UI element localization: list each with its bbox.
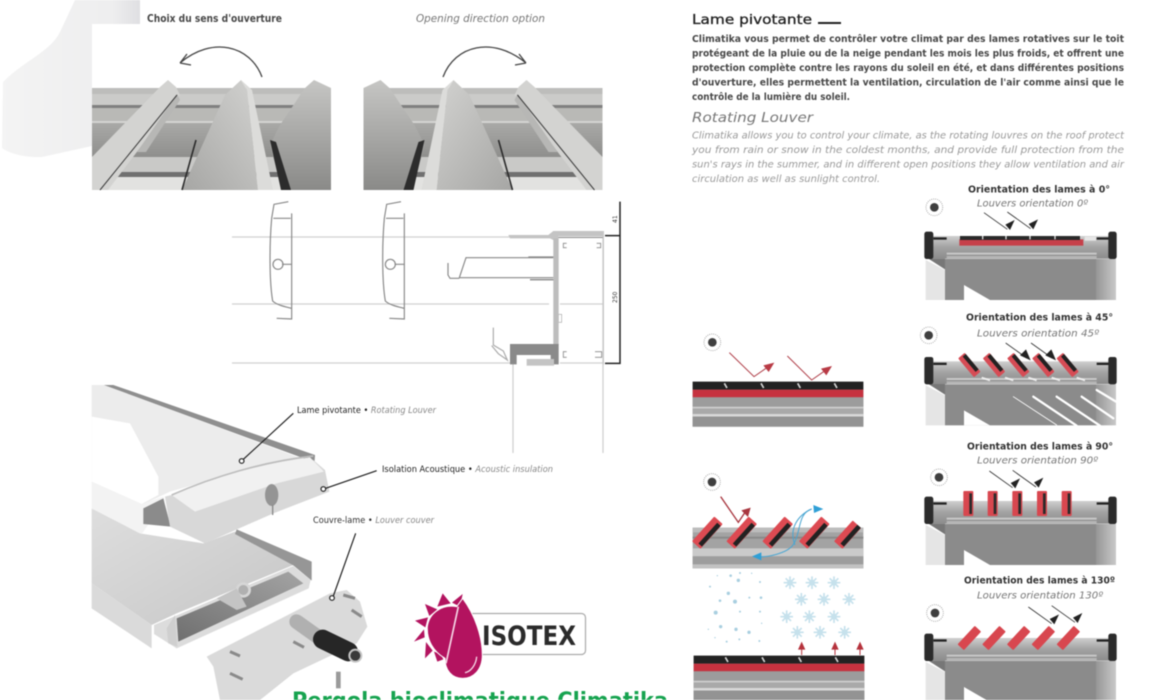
- panel: louvers at 45 degrees: [920, 327, 1117, 426]
- label: orientation 45: Louvers orientation 45º: [977, 328, 1100, 340]
- heading: lame pivotante: Lame pivotante: [692, 13, 812, 28]
- callout: couvre-lame: Couvre-lame • Louver couver: [313, 516, 434, 526]
- panel: rain and snow protection: [694, 572, 864, 700]
- callout: isolation acoustique: Isolation Acoustique • Acoustic insulation: [382, 465, 553, 475]
- callout: lame pivotante: Lame pivotante • Rotating Louver: [297, 406, 436, 416]
- label: orientation 130: Louvers orientation 130º: [977, 590, 1104, 602]
- arrow: opening right: [443, 47, 526, 77]
- arrow: opening left: [180, 47, 262, 77]
- decorative background shape: [2, 0, 140, 157]
- photo: louvers opening left: [92, 80, 331, 190]
- panel: ventilation with tilted louvers: [692, 474, 863, 568]
- text block: english description: [691, 130, 1125, 185]
- upper rotating louver: [92, 385, 329, 543]
- text block: english description: sun's rays in the summer, and in different open positions they allow ventilation and air: [692, 160, 1125, 170]
- panel: louvers at 90 degrees: [924, 469, 1117, 565]
- panel: sun reflection closed louvers: [693, 334, 863, 427]
- panel: louvers at 130 degrees: [924, 605, 1117, 700]
- label: orientation 45: Orientation des lames à 45°: [966, 312, 1113, 324]
- heading: rotating louver: Rotating Louver: [692, 110, 815, 126]
- label: orientation 90: Louvers orientation 90º: [977, 456, 1099, 466]
- label: orientation 0: Louvers orientation 0º: [977, 198, 1088, 210]
- text block: english description: Climatika allows you to control your climate, as the rotating louvres on the roof protect: [692, 130, 1125, 142]
- heading: opening direction option: Opening direction option: [416, 13, 545, 25]
- label: orientation 90: Orientation des lames à 90°: [967, 440, 1113, 452]
- lower louver profile: [92, 508, 312, 648]
- label: orientation 90: [967, 440, 1113, 466]
- label: orientation 0: Orientation des lames à 0°: [968, 184, 1110, 196]
- text block: french description: protégeant de la pluie ou de la neige pendant les mois les plus froids, et offrent une: [692, 48, 1124, 60]
- red up arrows: [798, 642, 864, 655]
- heading: choix du sens d'ouverture: Choix du sens d'ouverture: [147, 13, 282, 25]
- callout leaders: [239, 413, 377, 600]
- label: orientation 45: [966, 312, 1113, 340]
- text block: french description: Climatika vous permet de contrôler votre climat par des lames rotatives sur le toit: [692, 33, 1124, 45]
- exploded view of the louver: [92, 385, 377, 700]
- text block: english description: circulation as well as sunlight control.: [692, 174, 880, 185]
- text block: english description: you from rain or snow in the coldest months, and provide full protection from the: [691, 145, 1124, 156]
- label: orientation 0: [968, 184, 1110, 210]
- label: orientation 130: [964, 574, 1115, 602]
- label: orientation 130: Orientation des lames à 130º: [964, 574, 1115, 586]
- technical section drawing: 41: [612, 215, 619, 223]
- text block: french description: protection complète contre les rayons du soleil en été, et dans différentes positions: [692, 62, 1124, 74]
- logo: isotex: [414, 593, 586, 678]
- photo: louvers opening right: [364, 80, 602, 190]
- panel: louvers at 0 degrees: [924, 199, 1117, 300]
- text block: french description: [692, 33, 1124, 103]
- rain droplets: [708, 572, 762, 643]
- text block: french description: d'ouverture, elles permettent la ventilation, circulation de l'air comme ainsi que le: [692, 78, 1124, 88]
- technical section drawing: 250: [612, 291, 619, 303]
- logo: isotex: ISOTEX: [482, 621, 576, 652]
- text block: french description: contrôle de la lumière du soleil.: [692, 91, 850, 103]
- snowflakes: [780, 576, 855, 639]
- end bracket with axle: [207, 590, 367, 700]
- technical section drawing: [232, 202, 620, 453]
